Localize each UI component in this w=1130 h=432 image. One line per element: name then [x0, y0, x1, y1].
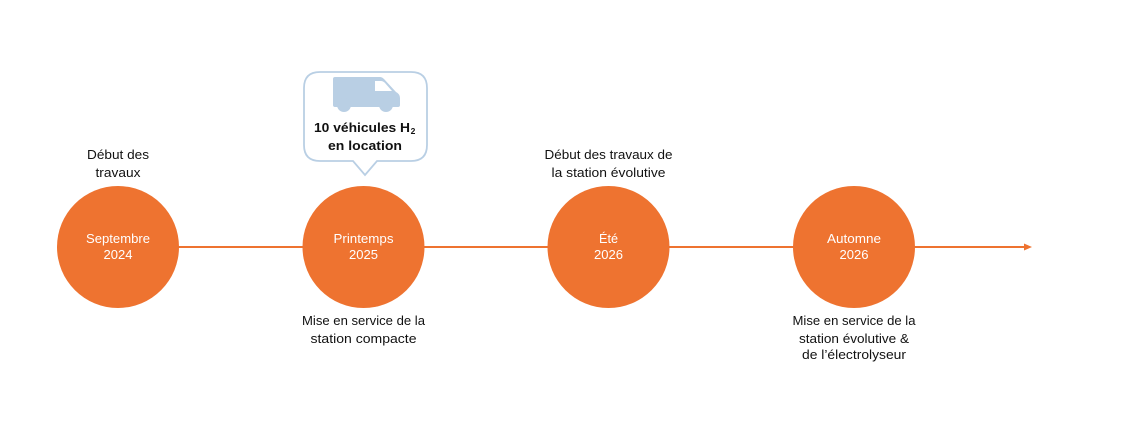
milestone: Automne 2026: 2026 — [840, 247, 868, 262]
callout label: 10 véhicules H — [314, 120, 410, 135]
text: Mise en service de la station évolutive et de l'électrolyseur — [792, 313, 916, 362]
callout label: en location — [328, 138, 402, 153]
milestone: Été 2026: Été — [599, 231, 618, 246]
callout label — [314, 120, 416, 153]
text: Mise en service de la station compacte — [302, 313, 426, 346]
milestone: Été 2026 — [548, 186, 670, 308]
text: Mise en service de la station évolutive et de l'électrolyseur: de l’électrolyseur — [802, 347, 907, 362]
text: Début des travaux de la station évolutive: Début des travaux de — [544, 147, 672, 162]
text: Début des travaux — [87, 147, 150, 180]
milestone: Septembre 2024 — [57, 186, 179, 308]
callout bubble — [304, 72, 427, 175]
milestone: Printemps 2025: 2025 — [349, 247, 378, 262]
milestone: Automne 2026 — [793, 186, 915, 308]
timeline arrow — [170, 244, 1032, 250]
callout: 10 véhicules H2 en location — [304, 72, 427, 175]
text: Mise en service de la station compacte: Mise en service de la — [302, 313, 426, 328]
text: Mise en service de la station compacte: station compacte — [310, 331, 416, 346]
milestone: Été 2026: 2026 — [594, 247, 623, 262]
icon: van — [333, 77, 400, 112]
text: Début des travaux de la station évolutive — [544, 147, 672, 180]
callout label: 2 — [411, 126, 416, 136]
text: Début des travaux: Début des — [87, 147, 150, 162]
milestone: Automne 2026: Automne — [827, 231, 881, 246]
milestone: Printemps 2025 — [302, 186, 424, 308]
milestone: Septembre 2024: Septembre — [86, 231, 150, 246]
milestone: Septembre 2024: 2024 — [104, 247, 132, 262]
text: Début des travaux: travaux — [96, 165, 141, 180]
text: Mise en service de la station évolutive et de l'électrolyseur: station évolutive & — [799, 331, 909, 346]
milestone: Printemps 2025: Printemps — [334, 231, 394, 246]
text: Début des travaux de la station évolutive: la station évolutive — [552, 165, 666, 180]
text: Mise en service de la station évolutive et de l'électrolyseur: Mise en service de la — [792, 313, 916, 328]
